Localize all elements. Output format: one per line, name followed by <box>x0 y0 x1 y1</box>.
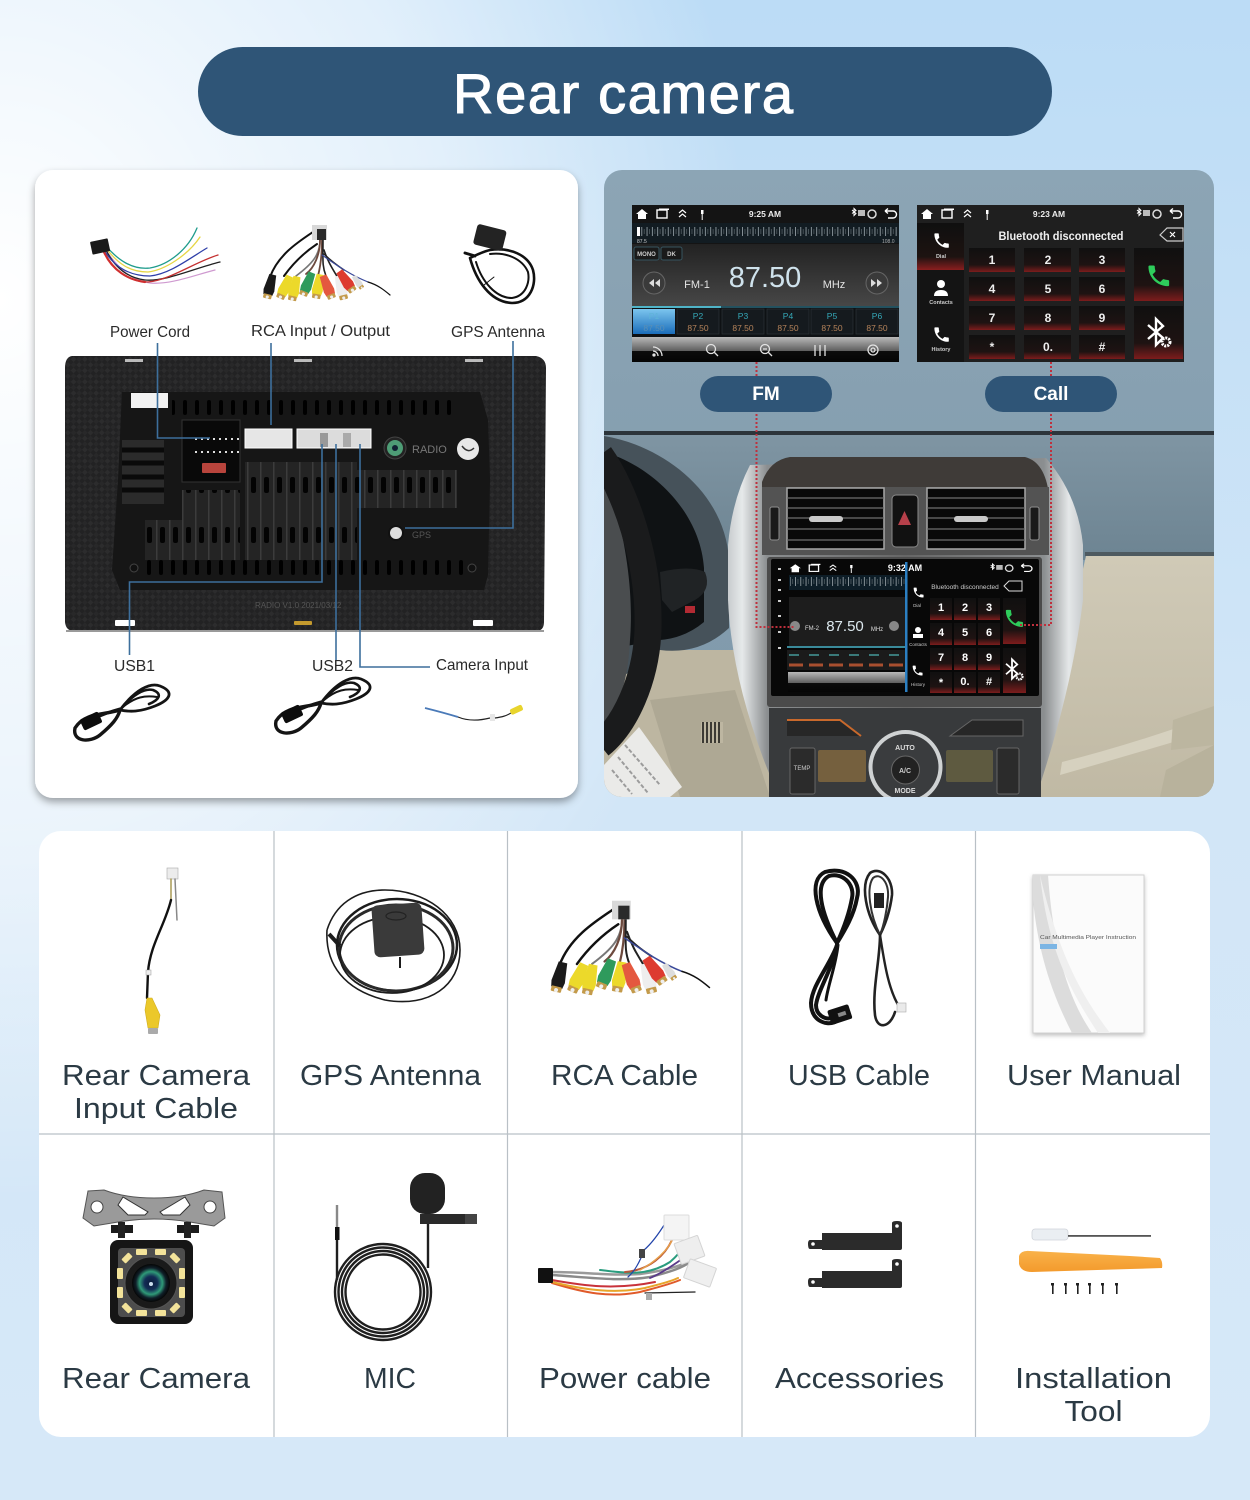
label pill: Call <box>985 376 1117 412</box>
screen: FM radio: DK <box>667 252 676 258</box>
head unit screen: 87.50 <box>826 618 864 635</box>
item: rear camera input cable <box>62 868 251 1125</box>
item: power cable <box>538 1215 717 1395</box>
icon: lavalier mic <box>335 1173 477 1340</box>
item: rear camera <box>62 1190 251 1395</box>
item: accessories <box>775 1221 944 1395</box>
icon: camera input cable <box>145 868 178 1034</box>
head unit screen: Contacts <box>909 642 928 647</box>
screen: FM radio: MHz <box>823 279 845 291</box>
screen: FM radio: P4 <box>783 311 793 321</box>
screen: FM radio: P6 <box>872 311 882 321</box>
screen: FM radio <box>632 205 899 362</box>
head unit rear view: RADIO V1.0 2021/03/12 <box>255 601 342 610</box>
label line 2: Input Cable <box>74 1093 238 1125</box>
item: installation tool <box>1015 1229 1172 1428</box>
icon: manual booklet <box>1033 875 1144 1033</box>
label: GPS Antenna: GPS Antenna <box>451 324 545 341</box>
screen: FM radio: P3 <box>738 311 748 321</box>
icon: mounting brackets <box>808 1221 902 1288</box>
head unit screen: 5 <box>962 627 968 639</box>
screen: phone call keypad: 6 <box>1099 282 1106 296</box>
screen: phone call keypad: 7 <box>989 311 996 325</box>
title pill <box>198 47 1052 136</box>
screen: phone call keypad: 0. <box>1043 340 1053 354</box>
label: User Manual <box>1007 1060 1181 1092</box>
head unit screen: 2 <box>962 602 968 614</box>
label: Camera Input: Camera Input <box>436 657 529 674</box>
screen: phone call keypad: 5 <box>1045 282 1052 296</box>
head unit rear view: GPS <box>412 530 431 540</box>
icon: GPS antenna <box>465 224 534 303</box>
head unit screen: 6 <box>986 627 992 639</box>
icon: tools <box>1019 1229 1162 1294</box>
panel: car dashboard and screens <box>600 170 1215 804</box>
screen: phone call keypad: * <box>990 340 995 354</box>
label: Power cable <box>539 1363 711 1395</box>
icon: RCA cable <box>549 901 710 996</box>
label pill: FM: FM <box>752 384 780 405</box>
head unit screen: 9 <box>986 652 992 664</box>
icon: harness <box>538 1215 717 1300</box>
label pill: Call: Call <box>1034 384 1068 405</box>
head unit screen: Bluetooth disconnected <box>931 584 999 591</box>
screen: phone call keypad: 4 <box>989 282 996 296</box>
head unit screen: 7 <box>938 652 944 664</box>
screen: FM radio: P5 <box>827 311 837 321</box>
screen: phone call keypad <box>917 205 1184 362</box>
screen: FM radio: 87.50 <box>643 323 665 333</box>
label: Power Cord: Power Cord <box>110 324 190 341</box>
car dashboard photo: TEMP <box>794 766 810 772</box>
label: USB Cable <box>788 1060 930 1092</box>
label: Rear Camera <box>62 1363 251 1395</box>
screen: phone call keypad: 9 <box>1099 311 1106 325</box>
icon: RCA cable <box>262 225 390 302</box>
head unit screen: 8 <box>962 652 968 664</box>
head unit screen <box>778 562 1032 693</box>
screen: FM radio: 87.50 <box>687 323 709 333</box>
screen: FM radio: 87.50 <box>729 305 801 337</box>
icon: USB2 cable <box>276 678 370 733</box>
head unit screen: 0. <box>960 676 970 688</box>
icon: manual booklet: Car Multimedia Player Instruction <box>1040 935 1136 941</box>
icon: camera input cable <box>425 704 524 721</box>
label: MIC <box>364 1363 416 1395</box>
label pill: FM <box>700 376 832 412</box>
screen: phone call keypad: 8 <box>1045 311 1052 325</box>
screen: FM radio: 87.50 <box>821 323 843 333</box>
screen: phone call keypad: # <box>1099 340 1106 354</box>
item: microphone <box>335 1173 477 1395</box>
head unit screen: Dial <box>913 603 921 608</box>
head unit rear view: RADIO <box>412 444 447 456</box>
screen: FM radio: 87.50 <box>866 323 888 333</box>
screen: FM radio: 87.50 <box>777 323 799 333</box>
car dashboard photo: AUTO <box>895 745 915 752</box>
car dashboard photo: A/C <box>899 768 911 775</box>
head unit screen: 4 <box>938 627 945 639</box>
screen: phone call keypad: Contacts <box>929 300 953 306</box>
title pill: Rear camera <box>453 62 794 125</box>
item: user manual <box>1007 875 1181 1092</box>
screen: phone call keypad: History <box>932 347 951 353</box>
item: USB cable <box>788 871 930 1092</box>
icon: camera with LED ring <box>83 1190 225 1324</box>
label line 2: Tool <box>1064 1396 1122 1428</box>
label: RCA Cable <box>551 1060 698 1092</box>
panel: wiring diagram <box>35 170 578 798</box>
icon: USB cables <box>811 871 906 1025</box>
panel: included accessories grid <box>39 831 1210 1437</box>
car dashboard photo: MODE <box>894 788 916 795</box>
screen: phone call keypad: Bluetooth disconnected <box>998 229 1124 243</box>
screen: FM radio: 87.50 <box>729 262 801 294</box>
head unit rear view <box>65 356 546 632</box>
label: RCA Input / Output: RCA Input / Output <box>251 323 391 340</box>
head unit screen: 1 <box>938 602 944 614</box>
screen: phone call keypad: Dial <box>936 254 947 260</box>
head unit screen: FM-2 <box>805 626 820 632</box>
connector callout lines <box>130 341 513 667</box>
screen: FM radio: 87.50 <box>732 323 754 333</box>
screen: phone call keypad: 3 <box>1099 253 1106 267</box>
car dashboard photo <box>600 431 1215 804</box>
screen: FM radio: MONO <box>637 252 656 258</box>
screen: phone call keypad: 1 <box>989 253 996 267</box>
pointer: dotted red leaders <box>756 362 1051 627</box>
head unit screen: * <box>939 677 944 689</box>
label: Installation <box>1015 1363 1172 1395</box>
head unit screen: # <box>986 676 992 688</box>
screen: FM radio: 87.5 <box>637 239 647 245</box>
head unit screen: MHz <box>871 627 883 633</box>
item: RCA cable <box>549 901 710 1092</box>
label: USB1: USB1 <box>114 658 155 675</box>
label: GPS Antenna <box>300 1060 482 1092</box>
head unit screen: History <box>911 682 926 687</box>
screen: FM radio: 108.0 <box>882 239 895 245</box>
screen: phone call keypad: 2 <box>1045 253 1052 267</box>
icon: GPS antenna coil <box>327 890 460 1002</box>
screen: phone call keypad: 9:23 AM <box>1033 209 1065 219</box>
screen: FM radio: P2 <box>693 311 703 321</box>
screen: FM radio: FM-1 <box>684 279 710 291</box>
screen: FM radio: 9:25 AM <box>749 209 781 219</box>
label: USB2: USB2 <box>312 658 353 675</box>
item: GPS antenna <box>300 890 482 1092</box>
icon: power cord <box>90 228 220 283</box>
label: Rear Camera <box>62 1060 251 1092</box>
head unit screen: 3 <box>986 602 992 614</box>
screen: FM radio: P1 <box>649 311 659 321</box>
head unit screen: 9:32 AM <box>888 563 922 573</box>
icon: USB1 cable <box>75 685 169 740</box>
label: Accessories <box>775 1363 944 1395</box>
